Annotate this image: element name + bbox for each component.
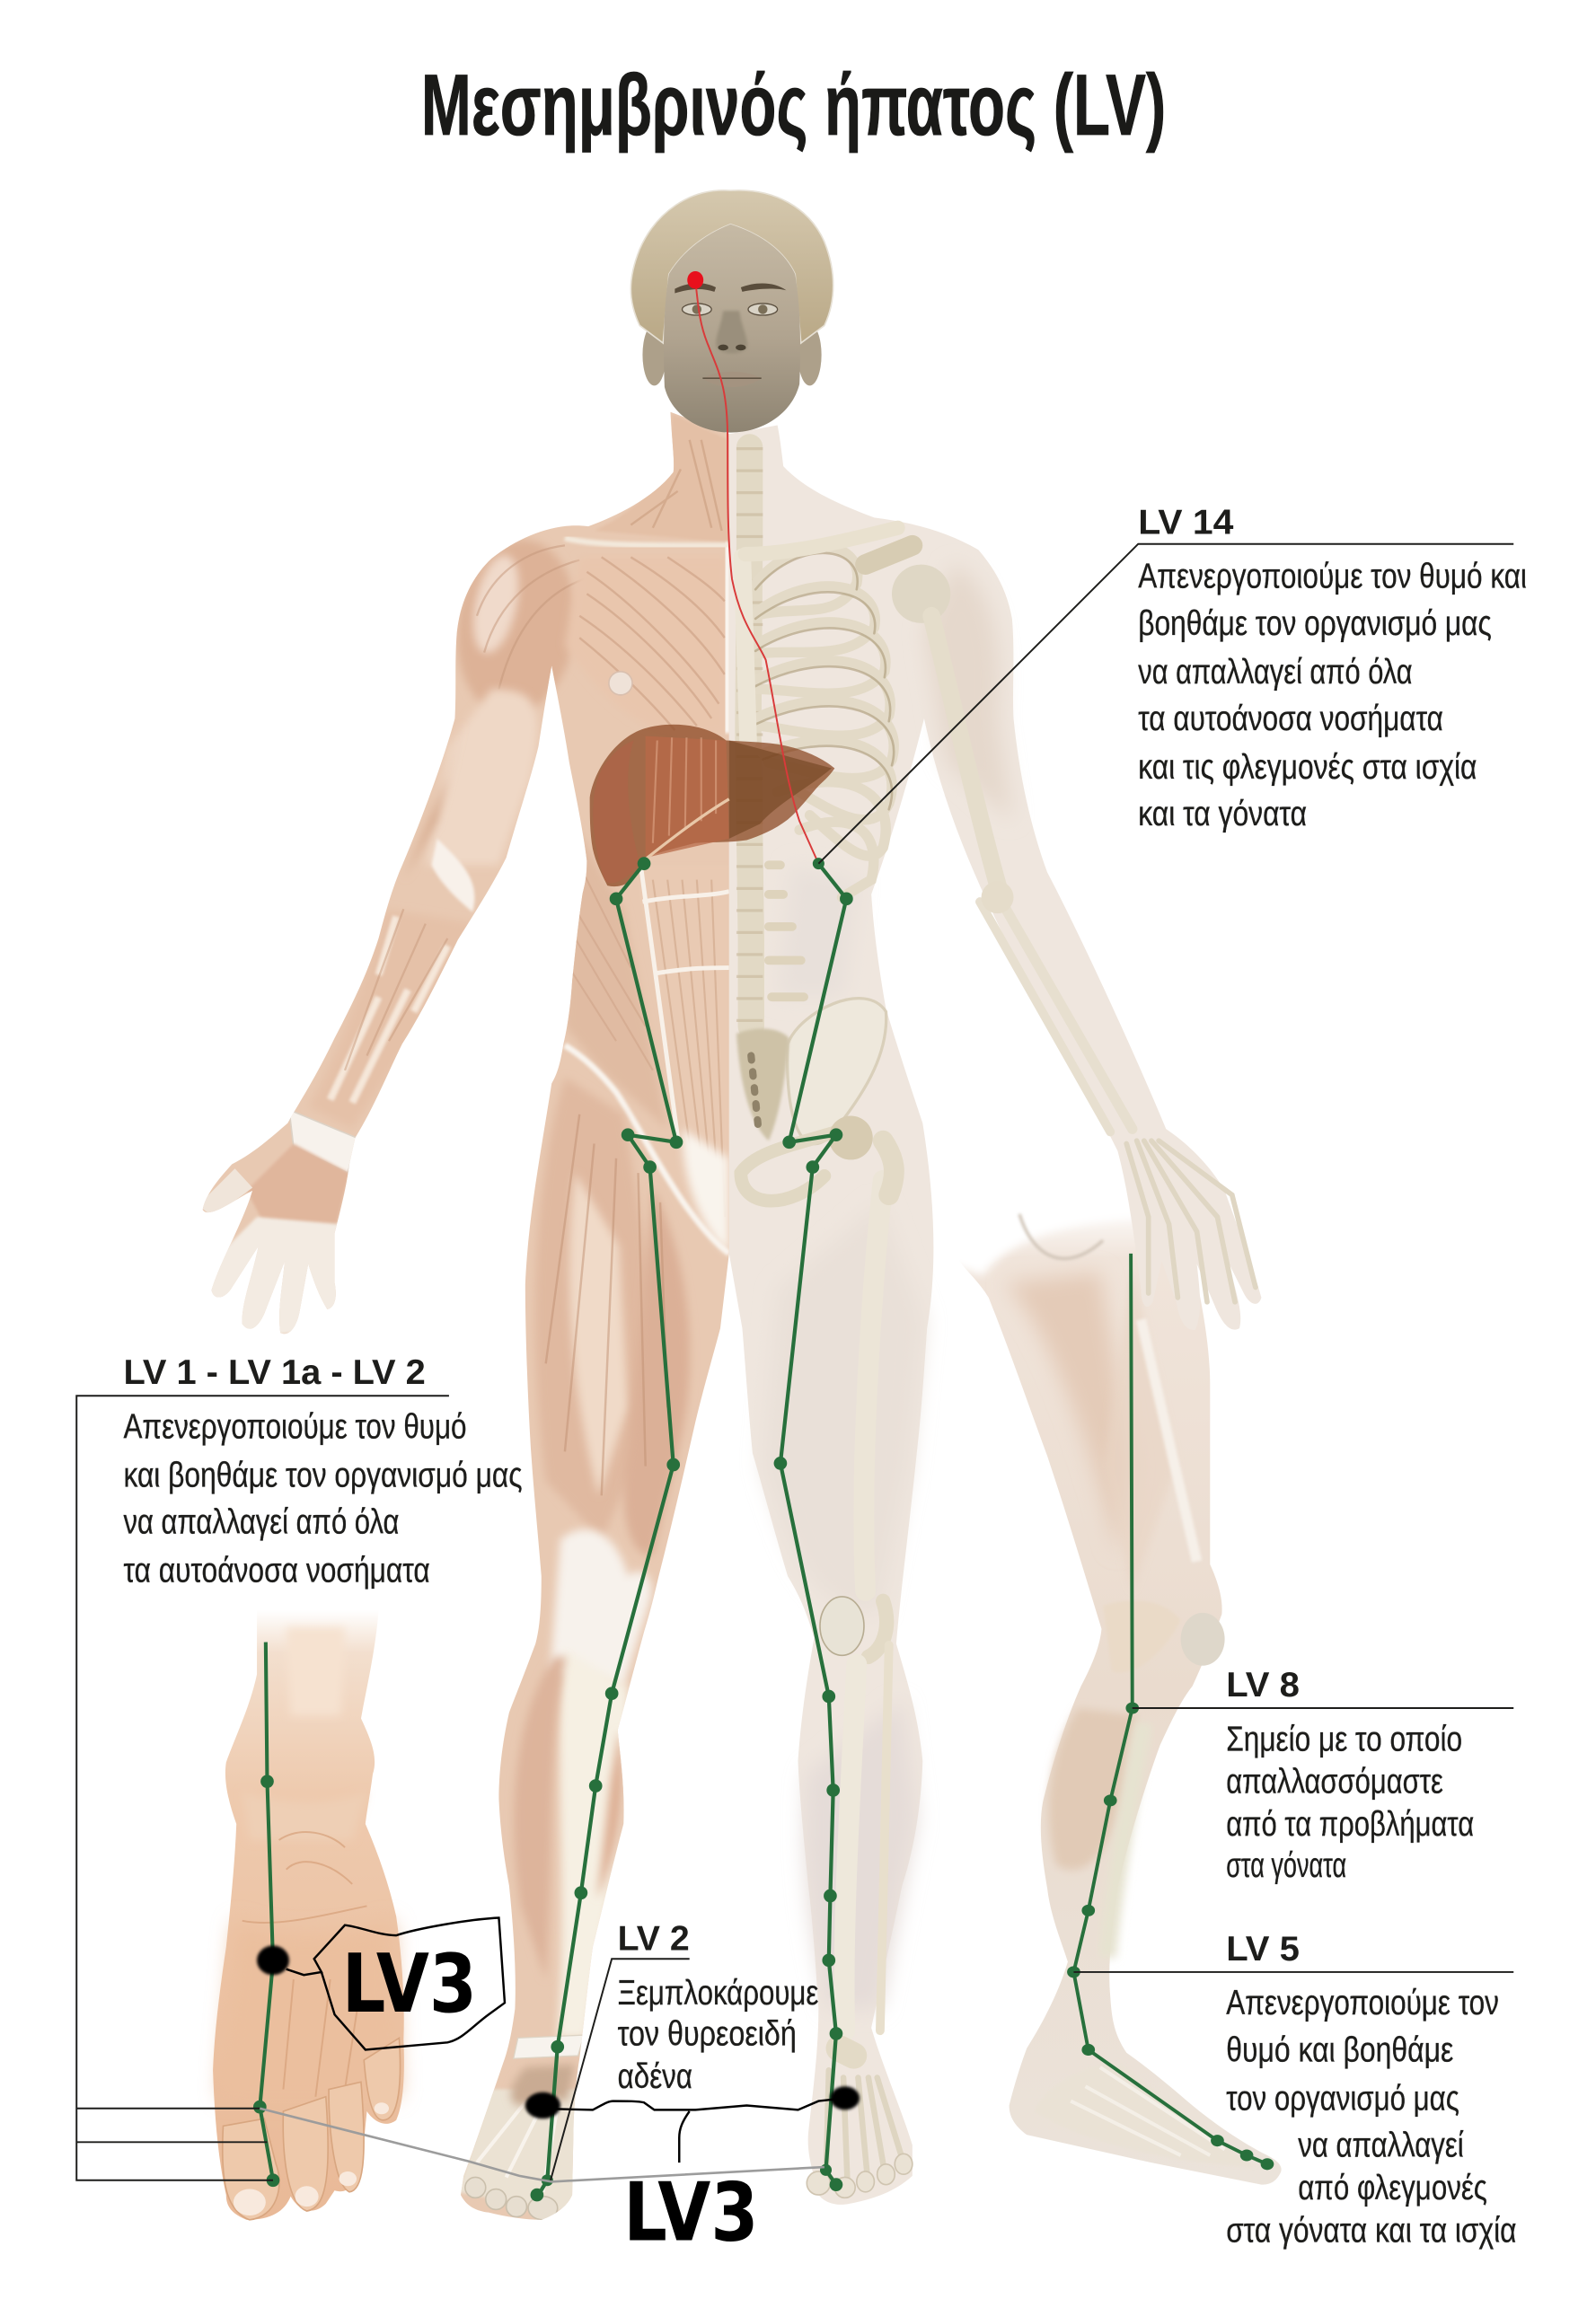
eyes bbox=[683, 304, 711, 315]
hand-drawn LV3 outline on foot bbox=[287, 1918, 505, 2049]
left foot toes bbox=[465, 2177, 558, 2220]
text block: LV 1 - LV 1a - LV 2: Απενεργοποιούμε τον θυμό bbox=[123, 1408, 467, 1447]
foot detail bbox=[213, 1610, 404, 2220]
neck muscles bbox=[595, 413, 729, 542]
forearm bones bbox=[998, 894, 1133, 1129]
translucent shading bbox=[924, 565, 1012, 821]
text block: LV 14 bbox=[1138, 503, 1527, 833]
calf bbox=[1049, 1708, 1137, 1870]
sacrum bbox=[736, 1028, 789, 1141]
fingers white bbox=[212, 1216, 338, 1334]
muscled left half of the body bbox=[191, 412, 729, 2220]
text block: LV 2: τον θυρεοειδή bbox=[618, 2015, 797, 2054]
text block: LV 2: LV 2 bbox=[618, 1919, 690, 1958]
label LV3 on foot: LV3 bbox=[342, 1938, 477, 2031]
title: Μεσημβρινός ήπατος (LV) bbox=[421, 57, 1166, 154]
text block: LV 1 - LV 1a - LV 2: LV 1 - LV 1a - LV 2 bbox=[123, 1353, 426, 1392]
ribs bbox=[754, 547, 894, 897]
green meridian on side leg bbox=[1067, 1254, 1274, 2170]
text block: LV 5: στα γόνατα και τα ισχία bbox=[1226, 2211, 1516, 2250]
hand bones bbox=[1126, 1141, 1256, 1302]
ears bbox=[642, 324, 666, 385]
text block: LV 1 - LV 1a - LV 2 bbox=[123, 1353, 523, 1590]
sternum tendon bbox=[726, 542, 729, 733]
icon: red point on forehead bbox=[687, 271, 703, 289]
upper arm bbox=[426, 689, 537, 865]
grey connectors bbox=[260, 2109, 824, 2181]
eyebrows bbox=[675, 283, 716, 294]
text block: LV 8: απαλλασσόμαστε bbox=[1226, 1763, 1443, 1801]
text block: LV 14: και τα γόνατα bbox=[1138, 795, 1307, 833]
green meridian right bbox=[774, 858, 853, 2191]
abdominals bbox=[634, 865, 729, 1246]
callout lines bbox=[76, 544, 1513, 2181]
text block: LV 2: Ξεμπλοκάρουμε bbox=[618, 1974, 818, 2013]
text block: LV 1 - LV 1a - LV 2: και βοηθάμε τον οργανισμό μας bbox=[123, 1457, 523, 1495]
forearm bbox=[316, 910, 470, 1122]
head bbox=[630, 190, 833, 433]
text block: LV 14: τα αυτοάνοσα νοσήματα bbox=[1138, 700, 1443, 738]
foot bones bbox=[1034, 2064, 1256, 2167]
translucent right half of the body bbox=[729, 425, 1261, 2205]
LV3 black acupoint marks bbox=[257, 1946, 860, 2118]
pelvis ilium bbox=[788, 999, 886, 1144]
text block: LV 5: τον οργανισμό μας bbox=[1226, 2079, 1459, 2118]
text block: LV 8: από τα προβλήματα bbox=[1226, 1805, 1474, 1844]
label LV3 between feet: LV3 bbox=[623, 2167, 758, 2260]
thigh top fade bbox=[939, 1158, 1217, 1275]
toe nails bbox=[234, 2102, 389, 2215]
text block: LV 2 bbox=[618, 1919, 818, 2096]
flank bbox=[566, 837, 665, 1121]
foot tendons bbox=[458, 2090, 579, 2214]
hair bbox=[630, 190, 833, 343]
calf muscles bbox=[514, 1657, 567, 1979]
ankle band bbox=[514, 2035, 584, 2058]
text block: LV 2: αδένα bbox=[618, 2057, 692, 2096]
text block: LV 5: από φλεγμονές bbox=[1298, 2169, 1487, 2207]
side view leg bbox=[939, 1158, 1282, 2185]
knee tendon bbox=[551, 1529, 651, 1687]
right foot toes bbox=[807, 2154, 913, 2198]
text block: LV 8 bbox=[1226, 1666, 1474, 1885]
text block: LV 14: να απαλλαγεί από όλα bbox=[1138, 653, 1413, 691]
text block: LV 1 - LV 1a - LV 2: τα αυτοάνοσα νοσήματα bbox=[123, 1552, 430, 1590]
text block: LV 8: στα γόνατα bbox=[1226, 1846, 1346, 1885]
text block: LV 5: να απαλλαγεί bbox=[1298, 2127, 1464, 2165]
thigh shade bbox=[1005, 1273, 1133, 1555]
text block: LV 5: LV 5 bbox=[1226, 1930, 1300, 1969]
knee bbox=[1103, 1600, 1181, 1672]
text block: LV 5 bbox=[1226, 1930, 1516, 2250]
thigh muscles bbox=[535, 1078, 653, 1539]
wrist band bbox=[289, 1110, 357, 1173]
red meridian line on head and torso bbox=[695, 280, 818, 864]
elbow tendon bbox=[431, 839, 474, 912]
skeleton bbox=[736, 447, 1256, 2198]
text block: LV 8: LV 8 bbox=[1226, 1666, 1300, 1704]
shoulder and humerus bbox=[866, 545, 913, 565]
sternum and clavicle bbox=[742, 557, 748, 740]
text block: LV 5: Απενεργοποιούμε τον bbox=[1226, 1984, 1499, 2022]
inguinal ligament bbox=[565, 1045, 729, 1254]
text block: LV 5: θυμό και βοηθάμε bbox=[1226, 2031, 1453, 2070]
mouth bbox=[702, 372, 762, 387]
foot tones bbox=[287, 1627, 345, 1715]
foot bones bbox=[839, 2048, 854, 2056]
hand-drawn LV3 connector between feet bbox=[530, 2098, 845, 2162]
text block: LV 8: Σημείο με το οποίο bbox=[1226, 1720, 1462, 1758]
face bbox=[664, 225, 800, 433]
text block: LV 14: και τις φλεγμονές στα ισχία bbox=[1138, 748, 1477, 787]
toes bbox=[223, 2038, 401, 2220]
green meridian left bbox=[531, 857, 683, 2201]
spine bbox=[748, 447, 751, 1026]
tibia and fibula bbox=[844, 1664, 857, 2030]
text block: LV 14: βοηθάμε τον οργανισμό μας bbox=[1138, 604, 1492, 643]
text block: LV 14: LV 14 bbox=[1138, 503, 1234, 542]
green meridian on foot bbox=[253, 1643, 279, 2187]
nose bbox=[716, 311, 747, 353]
deltoid bbox=[456, 537, 573, 707]
liver bbox=[590, 725, 834, 886]
lower belly highlight bbox=[683, 1129, 729, 1254]
femur bbox=[829, 1115, 873, 1159]
text block: LV 1 - LV 1a - LV 2: να απαλλαγεί από όλα bbox=[123, 1503, 399, 1542]
palm bbox=[247, 1143, 349, 1231]
pectoral muscle bbox=[564, 559, 584, 650]
main anatomical figure bbox=[191, 190, 1261, 2220]
knee and patella bbox=[820, 1597, 864, 1655]
nipple bbox=[609, 672, 632, 695]
